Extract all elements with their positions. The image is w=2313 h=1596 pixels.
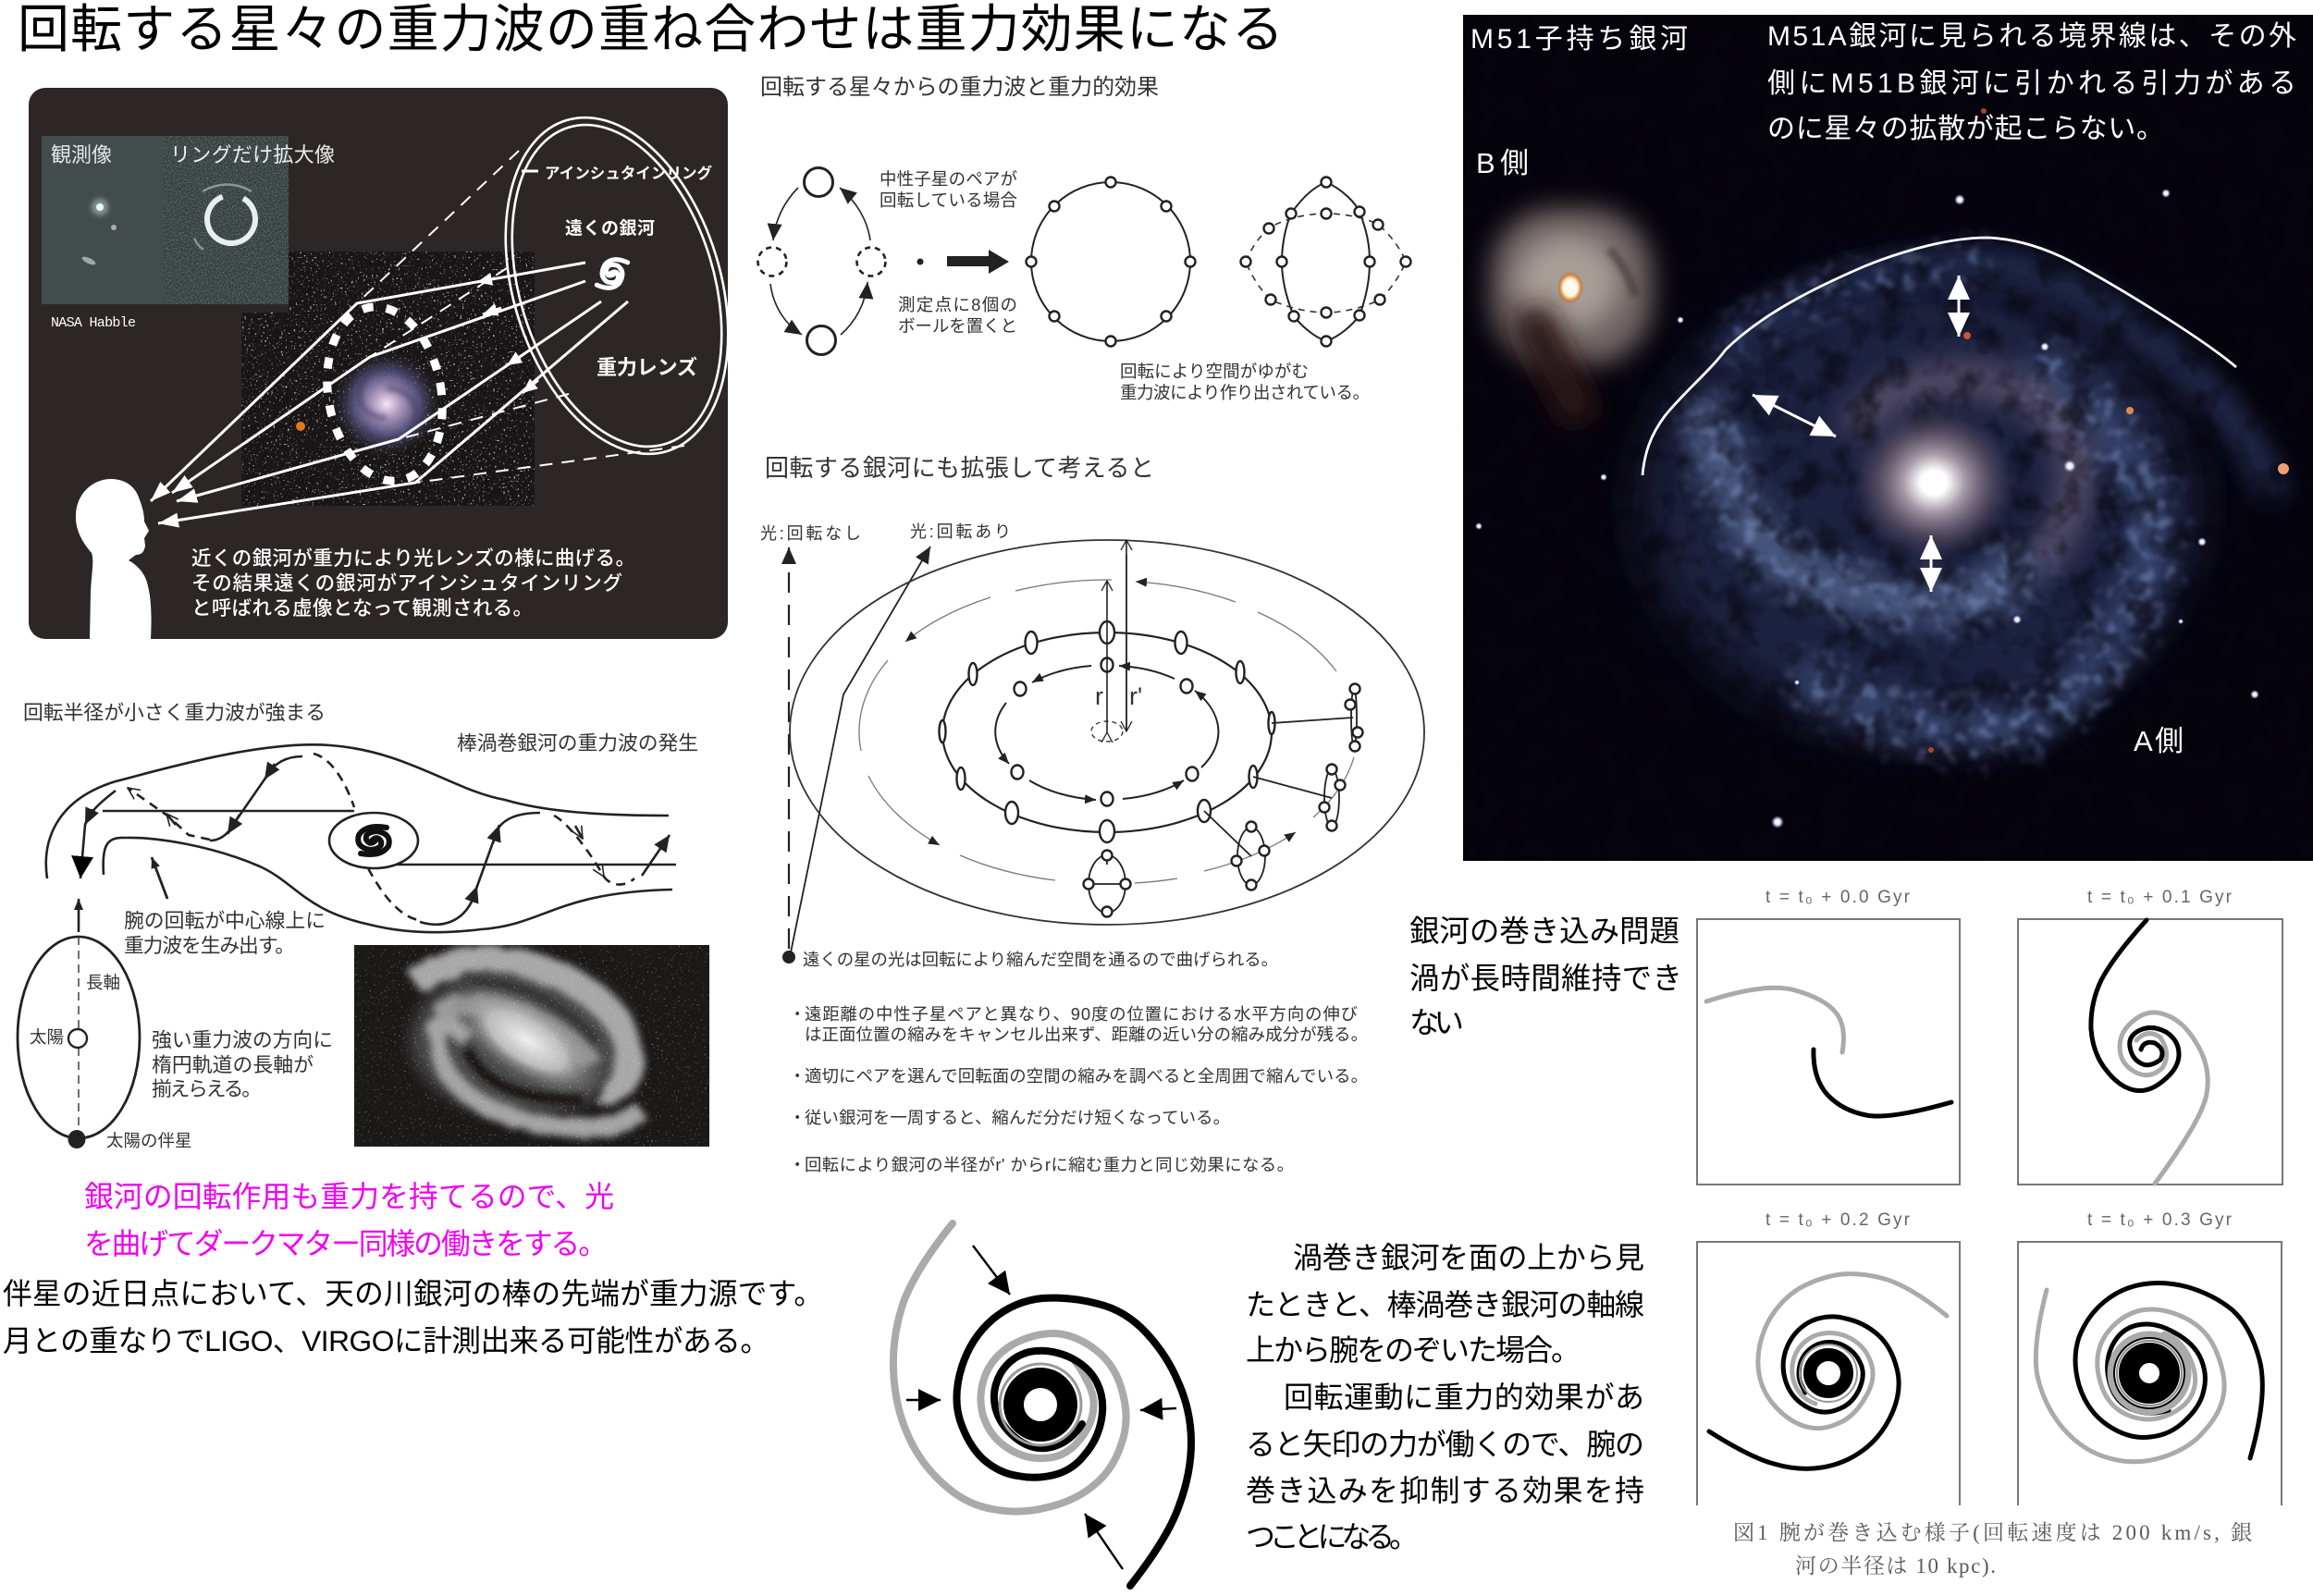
panel caption: と呼ばれる虚像となって観測される。: [191, 597, 533, 620]
ring enlarged image: [164, 136, 335, 304]
diagram: barred spiral wave: [46, 744, 676, 932]
text: LIGO VIRGO note: 月との重なりでLIGO、VIRGOに計測出来る可能性がある。: [3, 1324, 769, 1357]
text block: explanation bullets: ・: [789, 1155, 806, 1174]
text: M51 boundary description: M51A銀河に見られる境界線は、その外: [1767, 21, 2296, 52]
heading: gravitational wave from rotating stars: 回転する星々からの重力波と重力的効果: [760, 75, 1159, 100]
chart panel: t0 + 0.0 Gyr: t = t₀ + 0.0 Gyr: [1766, 888, 1911, 907]
distorted ball sets: [1084, 684, 1363, 917]
text block: explanation bullets: ・: [789, 1066, 806, 1086]
text: spiral explanation: たときと、棒渦巻き銀河の軸線: [1246, 1288, 1644, 1321]
text: spiral explanation: 回転運動に重力的効果があ: [1284, 1381, 1644, 1414]
heading: smaller rotation radius strengthens wave: 回転半径が小さく重力波が強まる: [23, 701, 326, 724]
stars: [1475, 108, 2289, 829]
text: winding problem: [1409, 915, 1682, 1039]
text: eight test balls: [898, 295, 1017, 336]
text block: explanation bullets: 適切にペアを選んで回転面の空間の縮みを調べると全周囲で縮んでいる。: [805, 1066, 1368, 1086]
label: Einstein ring: アインシュタインリング: [545, 164, 712, 182]
label: B side: B側: [1476, 147, 1529, 179]
text block: explanation bullets: 従い銀河を一周すると、縮んだ分だけ短くなっている。: [805, 1108, 1230, 1127]
text: M51 boundary description: のに星々の拡散が起こらない。: [1767, 114, 2164, 144]
star field photo: [241, 252, 535, 506]
diagram: neutron star pair: [758, 168, 923, 355]
observed image: NASA Habble: [51, 315, 136, 331]
Einstein ring ellipses: [467, 90, 767, 482]
text: space distorted by rotation: 重力波により作り出されている。: [1120, 383, 1370, 402]
label: distant galaxy: 遠くの銀河: [565, 218, 655, 239]
gray rotation arcs: [859, 580, 1354, 883]
text block: explanation bullets: ・: [789, 1108, 806, 1127]
heading: barred spiral gravitational waves: 棒渦巻銀河の重力波の発生: [457, 731, 698, 755]
outer galaxy ellipse: [790, 540, 1424, 925]
dashed lens ellipse: [314, 298, 456, 490]
diagram: elliptical orbit: 太陽の伴星: [106, 1131, 192, 1150]
text block: explanation bullets: 回転により銀河の半径がr' からrに縮む重力と同じ効果になる。: [805, 1155, 1294, 1174]
text: neutron star pair rotating: 中性子星のペアが: [880, 169, 1017, 189]
ring enlarged image: リングだけ拡大像: [170, 143, 335, 166]
panel caption: その結果遠くの銀河がアインシュタインリング: [191, 572, 622, 595]
text: winding problem: 渦が長時間維持でき: [1409, 962, 1682, 995]
arrow: unrotated straight light: [788, 547, 790, 949]
text: neutron star pair rotating: [880, 169, 1017, 210]
chart panel: t0 + 0.1 Gyr: t = t₀ + 0.1 Gyr: [2087, 888, 2233, 907]
text: magenta note: 銀河の回転作用も重力を持てるので、光: [84, 1180, 614, 1213]
text: spiral explanation: つことになる。: [1246, 1520, 1419, 1553]
dashed sight lines: [357, 151, 684, 483]
text: winding problem: ない: [1409, 1006, 1464, 1039]
boundary line: [1642, 238, 2236, 475]
label: gravitational lens: 重力レンズ: [597, 356, 697, 379]
panel caption: [191, 547, 635, 620]
text: arm rotation makes waves: 腕の回転が中心線上に: [124, 909, 326, 932]
photo: barred spiral galaxy: [354, 945, 709, 1147]
text block: explanation bullets: [789, 950, 1368, 1174]
radius arrows r and r': r': [1129, 682, 1142, 710]
diagram: elliptical orbit: 太陽: [30, 1027, 64, 1047]
text: magenta note: を曲げてダークマター同様の働きをする。: [84, 1227, 608, 1260]
diagram: elliptical orbit: 長軸: [86, 973, 120, 992]
figure caption: 河の半径は 10 kpc).: [1795, 1554, 1996, 1578]
text block: explanation bullets: は正面位置の縮みをキャンセル出来ず、距離の近い分の縮み成分が残る。: [805, 1025, 1368, 1044]
figure caption: 図1 腕が巻き込む様子(回転速度は 200 km/s, 銀: [1733, 1521, 2252, 1544]
label: light without rotation: 光:回転なし: [760, 524, 861, 543]
text: orbits align: 楕円軌道の長軸が: [152, 1053, 314, 1076]
panel: gravitational lens diagram: [29, 88, 767, 639]
diagram: rotating galaxy light bending: [760, 522, 1424, 964]
text: LIGO VIRGO note: [3, 1277, 823, 1357]
middle ring with ovals: [940, 621, 1274, 842]
heading: extending to rotating galaxies: 回転する銀河にも拡張して考えると: [765, 454, 1154, 482]
photo: M51 galaxy: [1463, 15, 2313, 861]
chart panel: t0 + 0.0 Gyr: [1697, 888, 1960, 1185]
text: space distorted by rotation: [1120, 362, 1370, 402]
text block: explanation bullets: 遠くの星の光は回転により縮んだ空間を通るので曲げられる。: [803, 950, 1278, 969]
text: space distorted by rotation: 回転により空間がゆがむ: [1120, 362, 1309, 381]
icon: central spiral galaxy: [329, 813, 418, 868]
text: eight test balls: ボールを置くと: [898, 316, 1017, 336]
icon: distant galaxy: [597, 256, 628, 291]
radius arrows r and r': r: [1095, 682, 1103, 710]
arrow: big right arrow: [947, 250, 1009, 274]
text: orbits align: 強い重力波の方向に: [152, 1028, 333, 1051]
diagram: elliptical orbit: [18, 937, 192, 1150]
text: spiral explanation: 上から腕をのぞいた場合。: [1246, 1333, 1581, 1367]
text: M51 boundary description: [1767, 21, 2296, 144]
chart panel: t0 + 0.3 Gyr: t = t₀ + 0.3 Gyr: [2087, 1210, 2233, 1230]
arrows: inward force: [906, 1246, 1176, 1569]
observed image: [42, 136, 164, 331]
text: magenta note: [84, 1180, 614, 1260]
label: M51: M51子持ち銀河: [1470, 24, 1688, 55]
chart panel: t0 + 0.1 Gyr: [2018, 888, 2282, 1185]
text: spiral explanation: 渦巻き銀河を面の上から見: [1293, 1241, 1644, 1274]
text block: explanation bullets: 遠距離の中性子星ペアと異なり、90度の位置における水平方向の伸び: [805, 1004, 1358, 1024]
chart panel: t0 + 0.2 Gyr: [1697, 1210, 1960, 1505]
radius arrows r and r': [1091, 540, 1142, 742]
text: spiral explanation: [1246, 1241, 1644, 1553]
text: LIGO VIRGO note: 伴星の近日点において、天の川銀河の棒の先端が重力源です。: [3, 1277, 823, 1310]
chart panel: t0 + 0.3 Gyr: [2018, 1210, 2282, 1505]
icon: person silhouette: [76, 479, 152, 639]
chart panel: t0 + 0.2 Gyr: t = t₀ + 0.2 Gyr: [1766, 1210, 1911, 1230]
text: arm rotation makes waves: 重力波を生み出す。: [124, 934, 295, 957]
inner ring arrows and balls: [995, 658, 1218, 806]
observed image: 観測像: [51, 143, 112, 166]
panel caption: 近くの銀河が重力により光レンズの様に曲げる。: [191, 547, 635, 570]
title: 回転する星々の重力波の重ね合わせは重力効果になる: [18, 0, 1284, 58]
text: neutron star pair rotating: 回転している場合: [880, 190, 1017, 210]
dot: distant star: [782, 951, 795, 964]
label: A side: A側: [2134, 725, 2184, 757]
galaxy disc: [1618, 227, 2297, 778]
arrow: to arm text: [152, 857, 167, 899]
text: arm rotation makes waves: [124, 909, 326, 957]
text: winding problem: 銀河の巻き込み問題: [1409, 915, 1679, 948]
text: eight test balls: 測定点に8個の: [898, 295, 1017, 314]
text: M51 boundary description: 側にM51B銀河に引かれる引力がある: [1767, 68, 2296, 99]
arrow: double arrows: [1753, 276, 1959, 592]
arrow: bent light: [791, 546, 930, 952]
diagram: large spiral with force arrows: [893, 1223, 1191, 1586]
text: spiral explanation: 巻き込みを抑制する効果を持: [1246, 1474, 1644, 1507]
diagram: ring of eight balls: [1027, 178, 1195, 346]
light ray arrows: [151, 263, 628, 523]
text block: explanation bullets: ・: [789, 1004, 806, 1024]
diagram: distorted ring: [1241, 178, 1411, 346]
companion galaxy: [1491, 208, 1653, 421]
label: light with rotation: 光:回転あり: [910, 522, 1011, 541]
figure caption: [1733, 1521, 2252, 1578]
text: spiral explanation: ると矢印の力が働くので、腕の: [1246, 1428, 1644, 1461]
text: orbits align: [152, 1028, 333, 1100]
arrow: up from orbit: [78, 899, 80, 932]
text: orbits align: 揃えらえる。: [152, 1077, 262, 1100]
